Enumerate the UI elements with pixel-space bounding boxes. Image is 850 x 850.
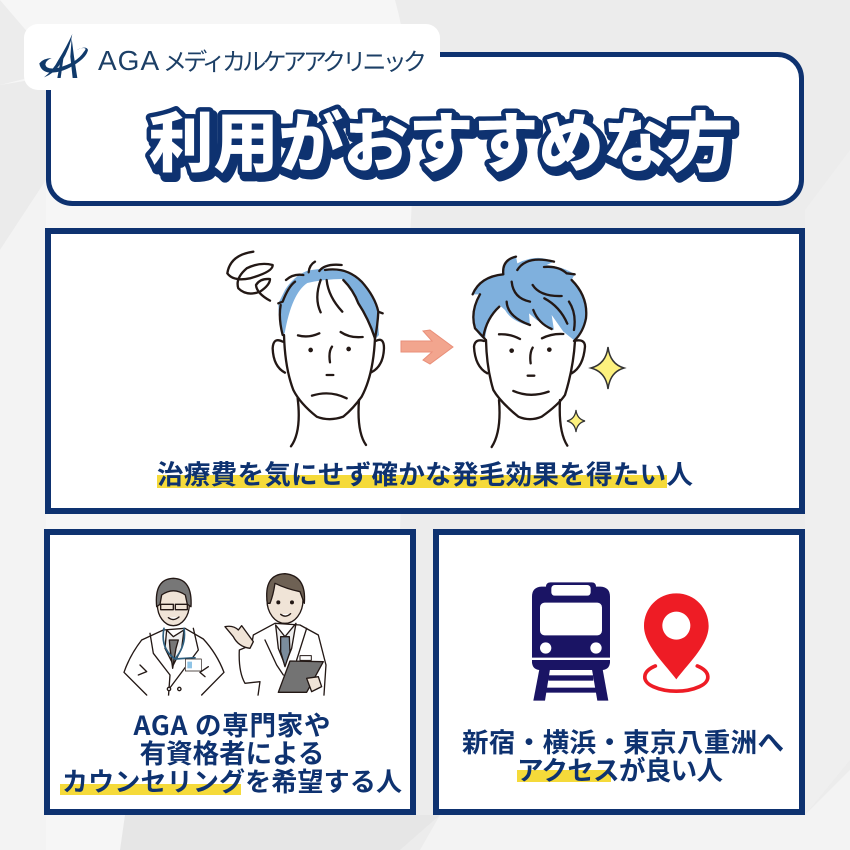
text: access: アクセスが良い人 [517, 749, 724, 788]
title: 利用がおすすめな方 [151, 95, 737, 189]
logo wordmark: メディカルケアアクリニック [163, 42, 427, 77]
text: counseling: 有資格者による [140, 732, 324, 771]
illustration: confident man with full hair [473, 257, 586, 447]
icon: location pin [644, 593, 709, 691]
older doctor [124, 578, 224, 705]
icon: large sparkle [591, 347, 624, 389]
highlight [517, 770, 611, 782]
icon: clinic logo [39, 34, 88, 78]
logo tag [24, 24, 440, 90]
illustration: worried man with thin hair [227, 252, 384, 446]
text: counseling: AGA の専門家や [132, 704, 330, 743]
panel: title box [48, 54, 802, 204]
text: access [462, 721, 784, 788]
panel: counseling [47, 532, 413, 812]
text: counseling: カウンセリングを希望する人 [62, 762, 402, 799]
panel: hair results [48, 231, 802, 511]
arrow [401, 330, 453, 364]
logo wordmark: AGA [98, 45, 160, 76]
panel: access [436, 532, 802, 812]
illustration: two doctors [124, 574, 326, 705]
text: counseling [62, 704, 402, 799]
icon: train [532, 582, 610, 701]
highlight [157, 475, 667, 488]
highlight [60, 784, 241, 795]
younger doctor [225, 574, 326, 705]
text: cost: 治療費を気にせず確かな発毛効果を得たい人 [157, 453, 694, 492]
icon: small sparkle [567, 410, 585, 432]
text: access: 新宿・横浜・東京八重洲へ [462, 721, 784, 760]
title: 利用がおすすめな方 [148, 91, 734, 185]
